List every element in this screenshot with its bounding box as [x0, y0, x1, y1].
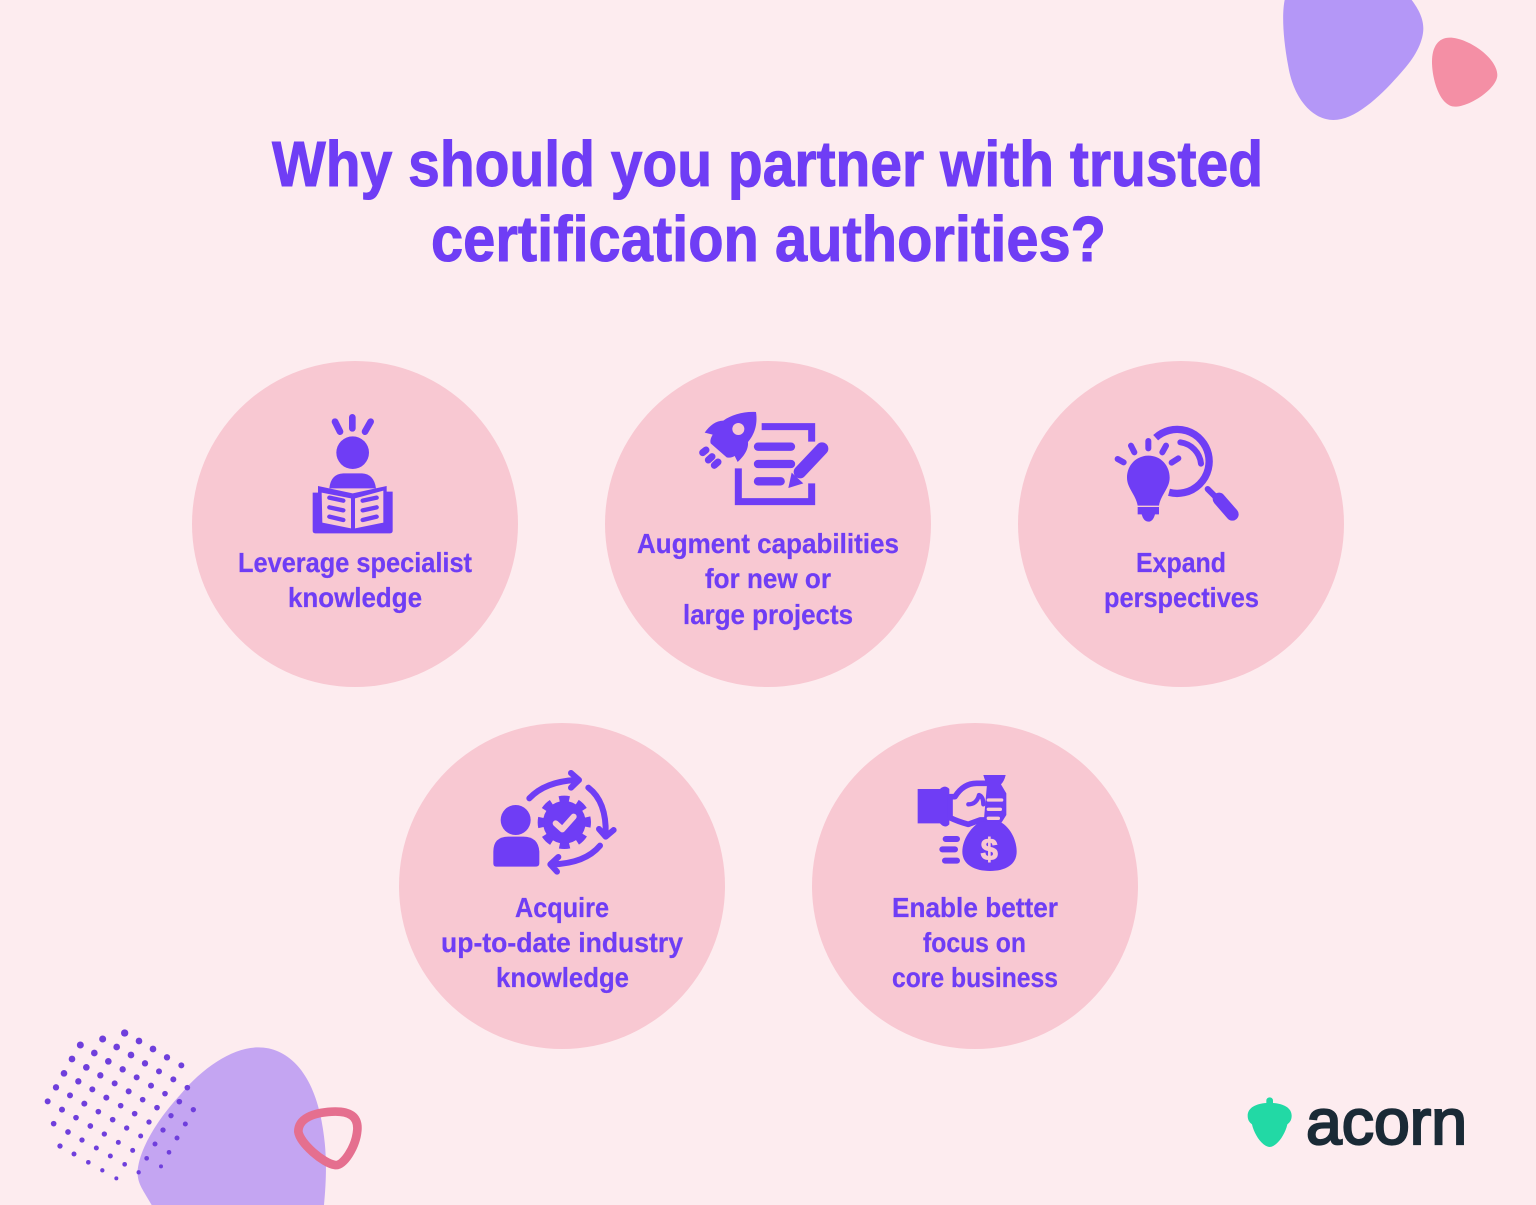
- icon: light bulb and magnifier: [1118, 429, 1232, 522]
- blob: top right pink: [1432, 38, 1497, 107]
- label: Enable better: [892, 892, 1058, 923]
- icon: hand holding money bag: [918, 775, 1017, 871]
- label: Acquire: [515, 892, 609, 923]
- title: [272, 128, 1263, 275]
- label: core business: [892, 962, 1058, 993]
- icon: hand holding money bag: $: [981, 832, 998, 866]
- label: [1104, 547, 1259, 613]
- icon: person with gear and cycle arrows: [493, 773, 614, 872]
- label: for new or: [705, 563, 831, 594]
- panel: leverage specialist knowledge: [192, 361, 518, 687]
- label: knowledge: [288, 582, 422, 613]
- icon: acorn: [1248, 1097, 1292, 1147]
- label: large projects: [683, 599, 853, 630]
- label: knowledge: [496, 962, 629, 993]
- label: Expand: [1136, 547, 1226, 578]
- label: up-to-date industry: [441, 927, 683, 958]
- blob: top right purple: [1283, 0, 1423, 120]
- panel: acquire up-to-date industry knowledge: [399, 723, 725, 1049]
- blob: bottom left purple: [138, 1047, 326, 1205]
- label: [637, 528, 899, 630]
- panel: expand perspectives: [1018, 361, 1344, 687]
- label: Augment capabilities: [637, 528, 899, 559]
- wordmark: acorn: [1306, 1086, 1467, 1158]
- icon: person reading book: [313, 417, 393, 533]
- title: Why should you partner with trusted: [272, 128, 1263, 200]
- label: focus on: [923, 927, 1026, 958]
- logo: acorn: [1248, 1086, 1467, 1158]
- label: [892, 892, 1058, 993]
- label: perspectives: [1104, 582, 1259, 613]
- label: [441, 892, 683, 993]
- icon: rocket and document: [703, 412, 822, 502]
- label: [238, 547, 472, 613]
- panel: enable better focus on core business: [812, 723, 1138, 1049]
- title: certification authorities?: [431, 203, 1106, 275]
- panel: augment capabilities: [605, 361, 931, 687]
- ring: pink outline: [298, 1112, 357, 1165]
- dot pattern: [45, 1029, 196, 1180]
- label: Leverage specialist: [238, 547, 472, 578]
